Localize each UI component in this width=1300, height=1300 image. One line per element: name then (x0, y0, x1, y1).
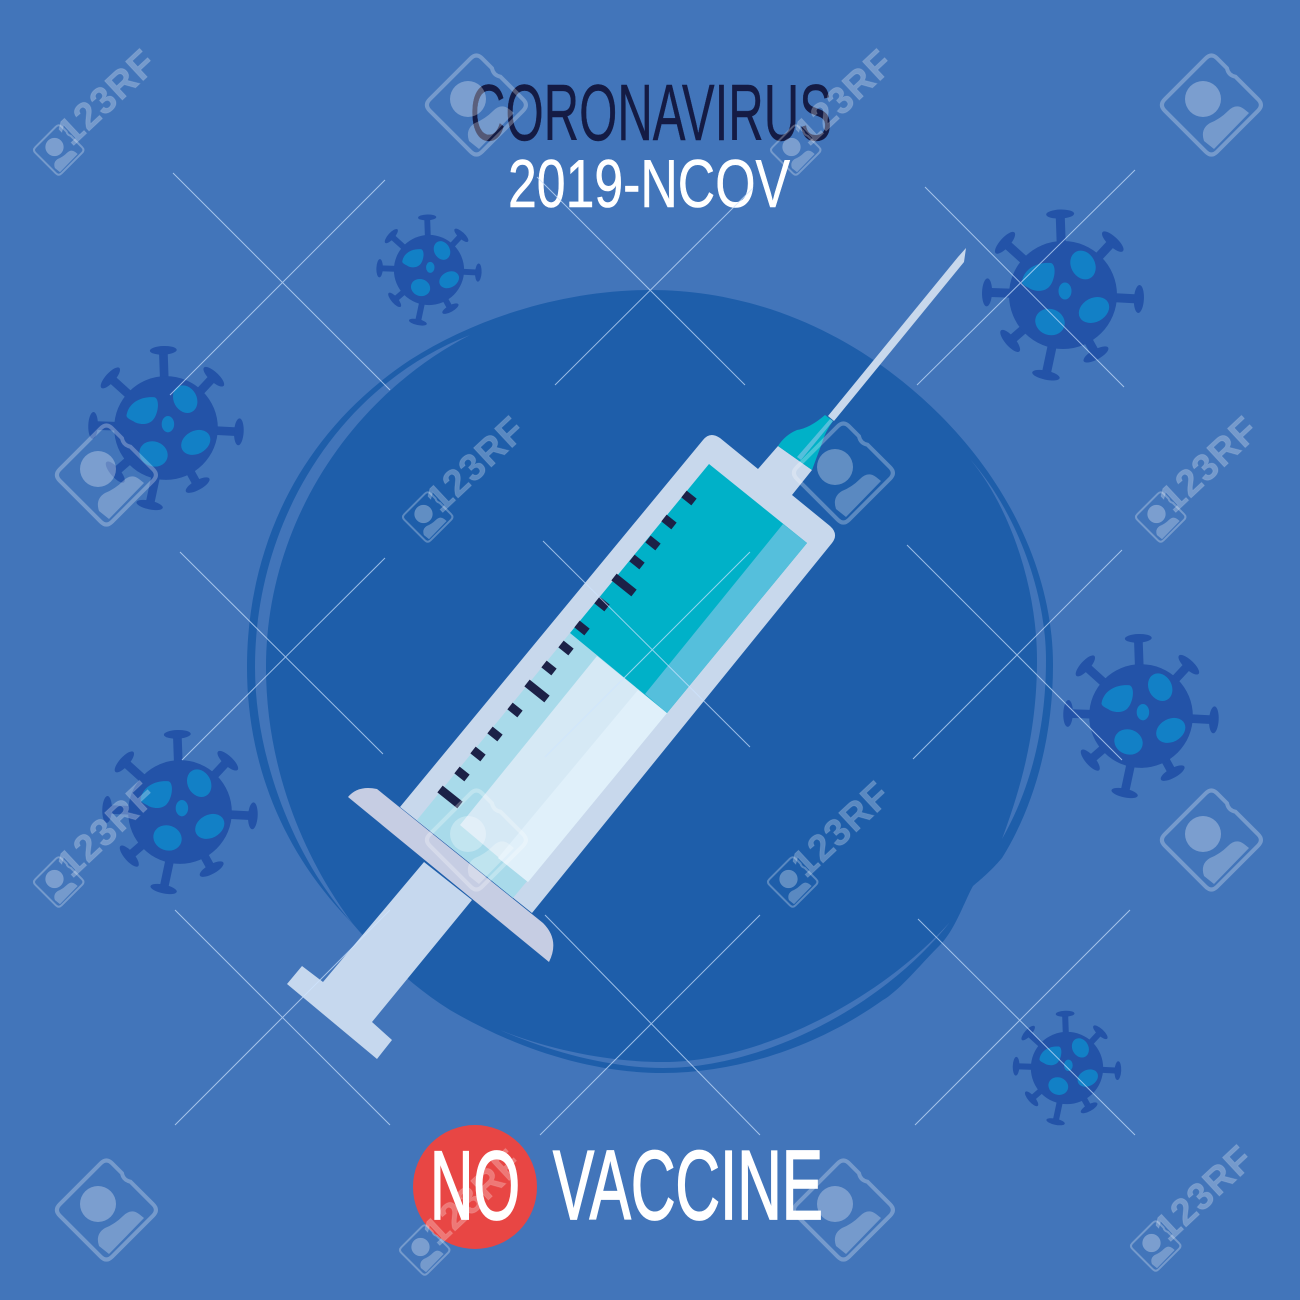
central circle (247, 290, 1053, 1073)
virus: left lower (102, 730, 258, 896)
watermarks: 123RF (49, 42, 164, 154)
subtitle: 2019-NCOV: 2019-NCOV (508, 146, 790, 222)
barrel (400, 435, 835, 913)
vaccine liquid (570, 464, 807, 713)
syringe (287, 248, 966, 1059)
flange (348, 788, 553, 962)
watermarks: 123RF (1151, 409, 1266, 521)
empty chamber (417, 633, 667, 898)
needle (828, 248, 966, 421)
watermarks: 123RF (49, 774, 164, 886)
title: coronavirus: CORONAVIRUS (470, 68, 832, 157)
vaccine label: VACCINE (553, 1130, 823, 1240)
virus: bottom right small (1012, 1010, 1122, 1127)
virus: left upper (88, 346, 244, 512)
watermarks: 123RF (786, 42, 901, 154)
virus: top right large (982, 209, 1145, 383)
virus: top centre small (376, 214, 482, 327)
hub (778, 415, 833, 470)
watermarks: 123RF (418, 409, 533, 521)
watermarks: 123RF (415, 1142, 530, 1254)
watermarks: 123RF (783, 774, 898, 886)
no vaccine badge: NO (430, 1131, 520, 1240)
virus: right middle (1063, 634, 1219, 800)
watermarks: 123RF (1146, 1138, 1261, 1250)
scale ticks (440, 494, 694, 805)
cross lines (170, 170, 1135, 1135)
no vaccine badge (413, 1125, 537, 1249)
plunger (287, 862, 472, 1059)
